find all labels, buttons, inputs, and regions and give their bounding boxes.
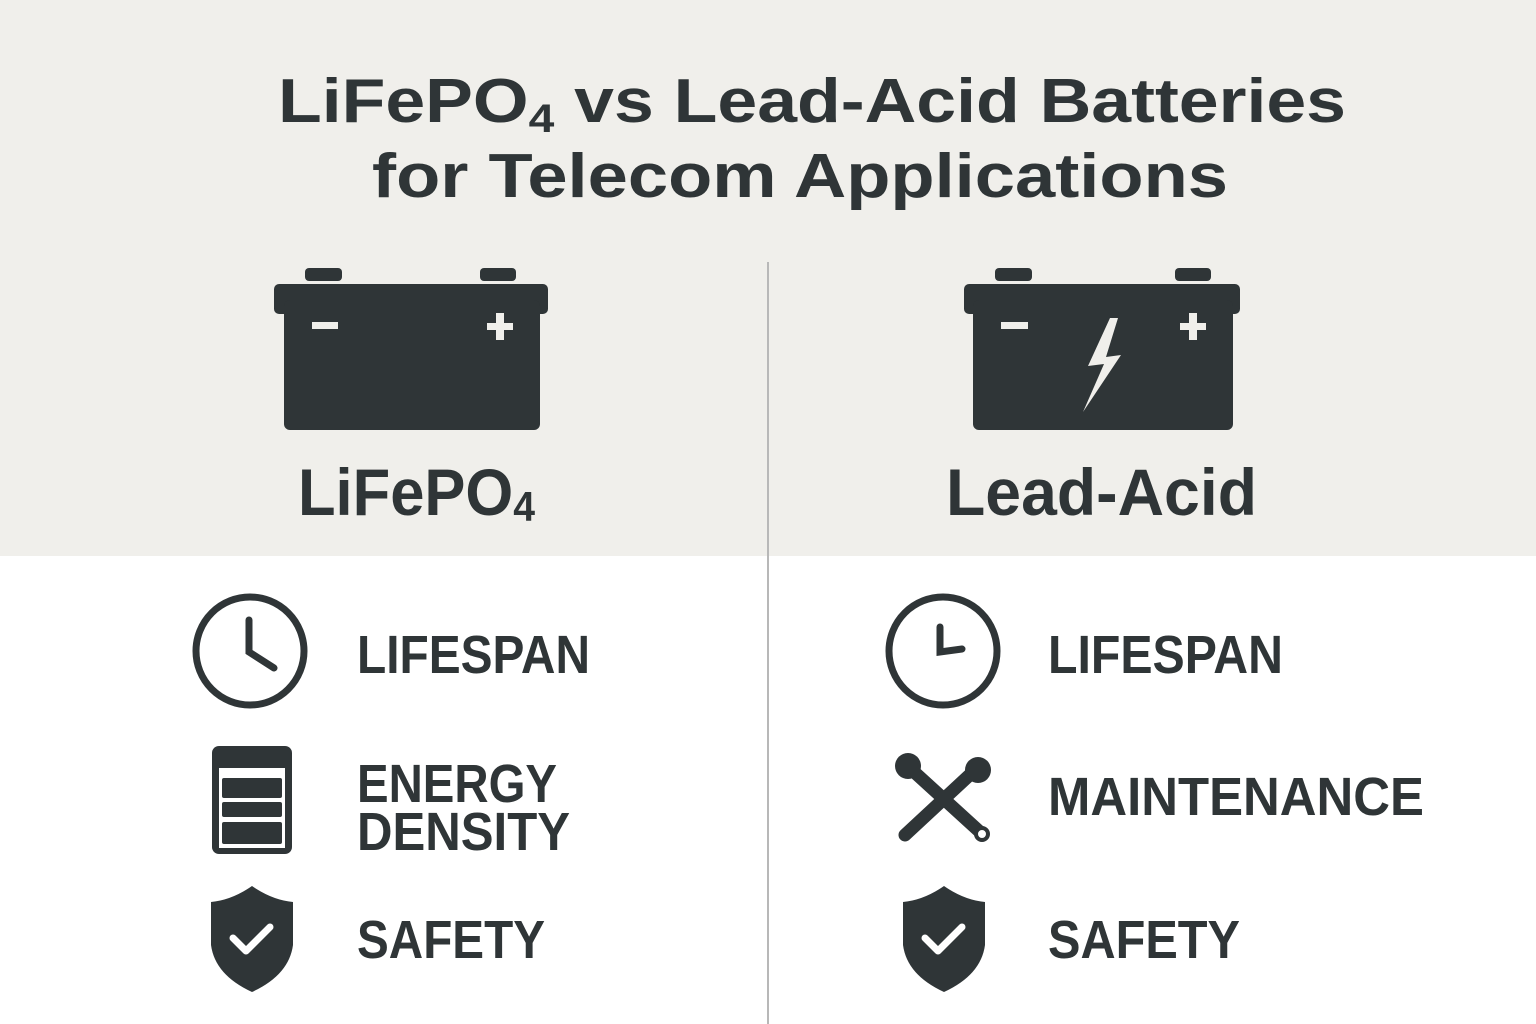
- title: [278, 67, 1346, 211]
- icon: wrench and spanner: [895, 753, 991, 840]
- text: ENERGY DENSITY: [357, 754, 570, 862]
- text: LIFESPAN right: LIFESPAN: [1048, 625, 1283, 685]
- title: for Telecom Applications: [372, 142, 1228, 211]
- icon: LiFePO4 battery: [274, 268, 548, 430]
- text: SAFETY left: SAFETY: [357, 910, 545, 970]
- icon: energy density: [212, 746, 292, 854]
- text: ENERGY DENSITY: DENSITY: [357, 802, 570, 862]
- icon: clock right: [889, 597, 997, 705]
- icon: lead-acid battery: [964, 268, 1240, 430]
- label: Lead-Acid: Lead-Acid: [946, 455, 1257, 529]
- label: LiFePO4: 4: [513, 483, 536, 530]
- icon: clock left: [196, 597, 304, 705]
- text: SAFETY right: SAFETY: [1048, 910, 1240, 970]
- icon: shield left: [211, 886, 293, 992]
- text: ENERGY DENSITY: ENERGY: [357, 754, 557, 814]
- icon: shield right: [903, 886, 985, 992]
- text: LIFESPAN left: LIFESPAN: [357, 625, 590, 685]
- text: MAINTENANCE: MAINTENANCE: [1048, 767, 1424, 827]
- title: 4: [529, 97, 555, 141]
- title: LiFePO: [278, 67, 495, 136]
- title: vs Lead-Acid Batteries: [554, 67, 1346, 136]
- label: LiFePO4: LiFePO: [298, 455, 529, 529]
